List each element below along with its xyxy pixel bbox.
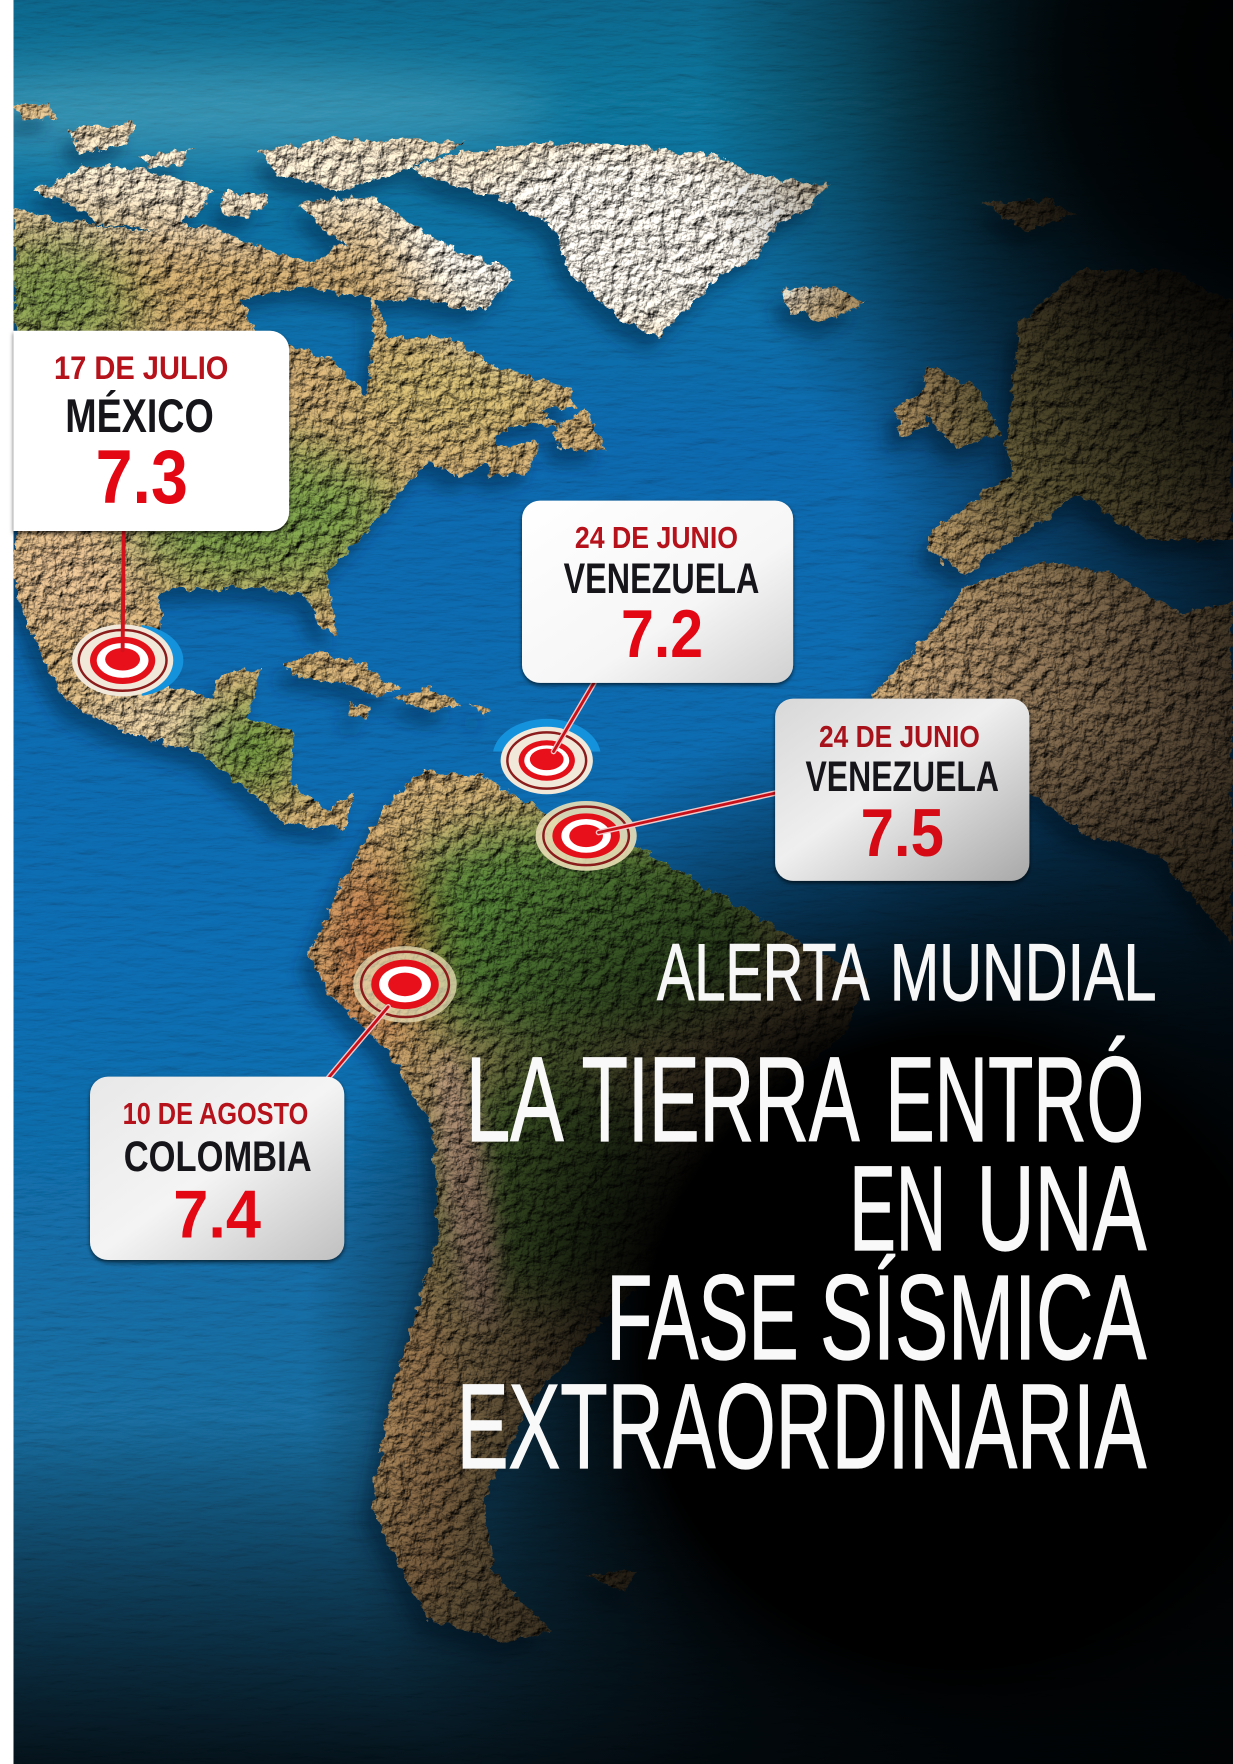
kicker: ALERTA MUNDIAL: ALERTA (657, 928, 870, 1018)
date: 10 DE AGOSTO (123, 1098, 308, 1131)
card: Venezuela 7.5 (775, 699, 1029, 881)
magnitude: 7.4 (173, 1177, 261, 1252)
country: VENEZUELA (806, 753, 999, 801)
card: Colombia 7.4 (90, 1077, 344, 1260)
icon: target Venezuela sur (536, 801, 637, 871)
card: Venezuela 7.2 (522, 501, 793, 683)
magnitude: 7.3 (96, 435, 188, 520)
headline: FASE (606, 1250, 799, 1385)
arctic haze (0, 68, 551, 158)
icon: target México (72, 624, 183, 696)
headline: UNA (976, 1141, 1147, 1276)
magnitude: 7.2 (621, 597, 703, 672)
date: 24 DE JUNIO (819, 721, 980, 754)
country: MÉXICO (65, 389, 214, 443)
icon: target Venezuela norte (493, 719, 601, 794)
date: 24 DE JUNIO (575, 522, 738, 555)
card: México 7.3 (14, 331, 289, 531)
white left margin (0, 0, 14, 1764)
country: VENEZUELA (564, 555, 759, 603)
icon: target Colombia (353, 946, 457, 1023)
country: COLOMBIA (124, 1133, 312, 1181)
leader lines (123, 531, 775, 1078)
date: 17 DE JULIO (54, 349, 228, 386)
headline: LA (466, 1032, 564, 1167)
Andes ridge (379, 1050, 511, 1609)
magnitude: 7.5 (861, 796, 944, 871)
headline: TIERRA (582, 1032, 860, 1167)
headline: EN (849, 1141, 946, 1276)
kicker: ALERTA MUNDIAL (657, 928, 1156, 1018)
headline (457, 1032, 1147, 1494)
